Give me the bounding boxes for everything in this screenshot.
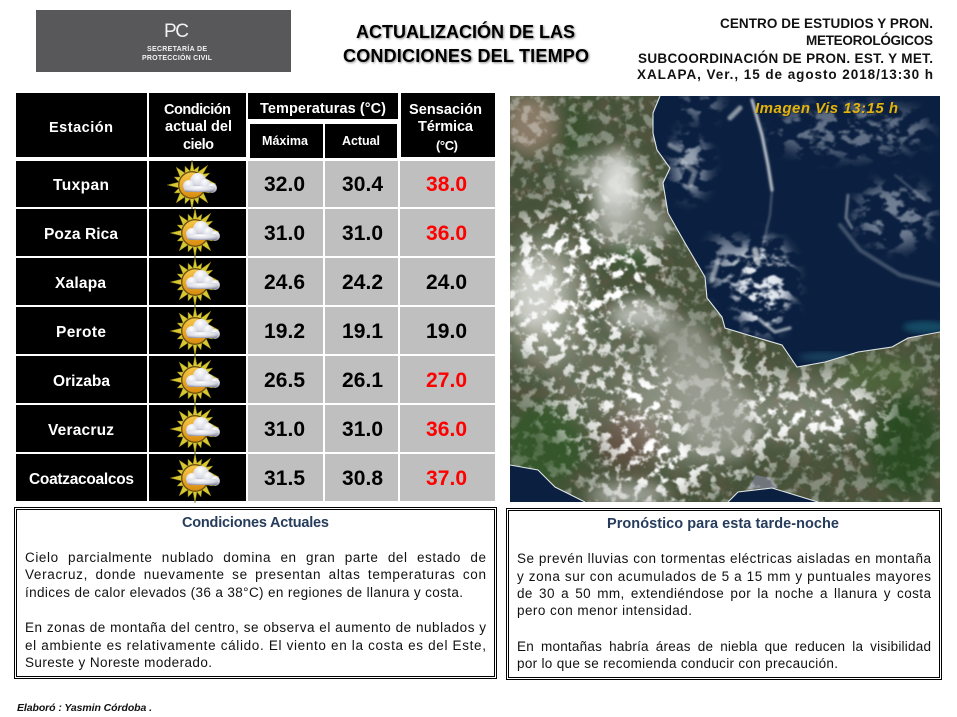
- row: Xalapa: 24.2: [342, 271, 383, 294]
- title: CONDICIONES DEL TIEMPO: [343, 46, 589, 66]
- row: Tuxpan: 32.0: [264, 173, 305, 196]
- text: current conditions: Veracruz, donde nuevamente se presentan altas temperaturas con: [25, 567, 486, 582]
- panel: Condiciones Actuales: [14, 508, 496, 678]
- header: Sensación Térmica: [401, 93, 495, 157]
- header: Condición actual del cielo: actual del: [165, 119, 232, 135]
- logo: Protección Civil: SECRETARÍA DE: [147, 44, 207, 53]
- logo: Protección Civil: PROTECCIÓN CIVIL: [142, 53, 213, 62]
- Pacific and lagoon: [510, 465, 585, 502]
- row: Veracruz: 31.0: [342, 418, 383, 441]
- satellite caption: Imagen Vis 13:15 h: [755, 100, 898, 117]
- text: forecast: En montañas habría áreas de niebla que reducen la visibilidad: [517, 639, 931, 654]
- row: Coatzacoalcos: 31.5: [264, 467, 305, 490]
- icon: sun and cloud: [170, 404, 220, 454]
- row: Perote: [16, 306, 495, 356]
- header: Actual: [325, 124, 397, 158]
- row: Xalapa: 24.6: [264, 271, 305, 294]
- row: Perote: 19.1: [342, 320, 383, 343]
- text: forecast: y zona sur con acumulados de 5 a 15 mm y puntuales mayores: [517, 569, 931, 584]
- row: Poza Rica: 36.0: [426, 222, 467, 245]
- header: Temperaturas: [248, 93, 398, 119]
- row: Poza Rica: [16, 208, 495, 258]
- row: Xalapa: [16, 257, 495, 307]
- row: Coatzacoalcos: [16, 453, 495, 503]
- row: Veracruz: 31.0: [264, 418, 305, 441]
- icon: sun and cloud: [170, 453, 220, 503]
- text: current conditions: [25, 550, 486, 670]
- header: Sensación Térmica: (°C): [436, 138, 458, 153]
- row: Coatzacoalcos: Coatzacoalcos: [29, 471, 134, 488]
- row: Poza Rica: 31.0: [264, 222, 305, 245]
- row: Perote: 19.0: [426, 320, 467, 343]
- satellite caption: Imagen Vis 13:15 h: [756, 101, 899, 118]
- panel: Pronóstico para esta tarde-noche: [506, 508, 942, 680]
- row: Coatzacoalcos: 30.8: [342, 467, 383, 490]
- heading: Condiciones Actuales: Condiciones Actuales: [182, 515, 329, 531]
- row: Veracruz: 36.0: [426, 418, 467, 441]
- logo: Protección Civil: PC: [164, 21, 189, 42]
- header: Sensación Térmica: Sensación: [409, 102, 482, 118]
- header: Máxima: [250, 124, 323, 158]
- broad haze: [505, 235, 870, 465]
- smooth cloud masses: [509, 150, 760, 507]
- header: Estación: [16, 93, 147, 157]
- header: Sensación Térmica: Térmica: [418, 119, 474, 135]
- table rows: [16, 160, 495, 503]
- icon: sun and cloud: [170, 208, 220, 258]
- logo: Protección Civil: [36, 10, 291, 72]
- icon: sun and cloud: [170, 355, 220, 405]
- row: Orizaba: [16, 355, 495, 405]
- text: forecast: pero con menor intensidad.: [517, 603, 692, 618]
- row: Xalapa: Xalapa: [55, 275, 106, 292]
- row: Veracruz: Veracruz: [48, 422, 114, 439]
- row: Orizaba: 27.0: [426, 369, 467, 392]
- icon: sun and cloud: [170, 257, 220, 307]
- credit: Elaboró : Yasmin Córdoba .: [17, 702, 152, 714]
- row: Xalapa: 24.0: [426, 271, 467, 294]
- sea speckled clouds: [663, 96, 940, 341]
- row: Veracruz: [16, 404, 495, 454]
- text: forecast: de 30 a 50 mm, extendiéndose por la noche a llanura y costa: [517, 586, 931, 601]
- row: Poza Rica: 31.0: [342, 222, 383, 245]
- text: current conditions: Cielo parcialmente nublado domina en gran parte del estado de: [25, 550, 486, 565]
- text: forecast: por lo que se recomienda conducir con precaución.: [517, 656, 838, 671]
- header: Estación: Estación: [49, 120, 113, 136]
- title: ACTUALIZACIÓN DE LAS: [357, 22, 576, 43]
- row: Perote: Perote: [56, 324, 106, 341]
- header: Máxima: Máxima: [262, 134, 309, 148]
- header: Condición actual del cielo: Condición: [164, 102, 231, 118]
- icon: sun and cloud: [170, 306, 220, 356]
- row: Poza Rica: Poza Rica: [44, 226, 118, 243]
- text: forecast: Se prevén lluvias con tormentas eléctricas aisladas en montaña: [517, 551, 931, 566]
- Gulf of Mexico: [653, 96, 940, 367]
- text: current conditions: En zonas de montaña del centro, se observa el aumento de nublados y: [25, 620, 486, 635]
- text: current conditions: el ambiente es relativamente cálido. El viento en la costa es del Este,: [25, 638, 486, 653]
- heading: Pronóstico: Pronóstico para esta tarde-noche: [607, 516, 839, 532]
- row: Orizaba: 26.5: [264, 369, 305, 392]
- header: Condición actual del cielo: cielo: [183, 137, 214, 153]
- institution heading: METEOROLÓGICOS: [806, 33, 933, 48]
- row: Tuxpan: Tuxpan: [53, 177, 109, 194]
- institution heading: [637, 16, 933, 82]
- institution heading: CENTRO DE ESTUDIOS Y PRON.: [720, 16, 933, 31]
- text: current conditions: índices de calor elevados (36 a 38°C) en regiones de llanura y costa.: [25, 585, 463, 600]
- coastlines: [510, 96, 940, 502]
- sea cloud streaks: [670, 100, 940, 332]
- institution heading: XALAPA, Ver., 15 de agosto 2018/13:30 h: [637, 67, 933, 82]
- title: ACTUALIZACIÓN DE LAS: [356, 21, 575, 42]
- institution heading: SUBCOORDINACIÓN DE PRON. EST. Y MET.: [638, 51, 933, 66]
- row: Perote: 19.2: [264, 320, 305, 343]
- text: current conditions: Sureste y Noreste moderado.: [25, 655, 212, 670]
- title: CONDICIONES DEL TIEMPO: [344, 47, 590, 67]
- row: Tuxpan: [16, 160, 495, 210]
- header: Actual: Actual: [342, 134, 380, 148]
- land speckled clouds: [510, 96, 940, 502]
- icon: sun and cloud: [167, 160, 217, 210]
- row: Tuxpan: 30.4: [342, 173, 383, 196]
- row: Tuxpan: 38.0: [426, 173, 467, 196]
- header: Condición actual del cielo: [149, 93, 246, 157]
- header: Temperaturas: Temperaturas (°C): [260, 101, 386, 117]
- text: forecast: [517, 551, 931, 671]
- row: Orizaba: Orizaba: [53, 373, 110, 390]
- row: Coatzacoalcos: 37.0: [426, 467, 467, 490]
- satellite image: [504, 95, 947, 507]
- row: Orizaba: 26.1: [342, 369, 383, 392]
- title: [343, 21, 590, 67]
- table header: [16, 93, 495, 158]
